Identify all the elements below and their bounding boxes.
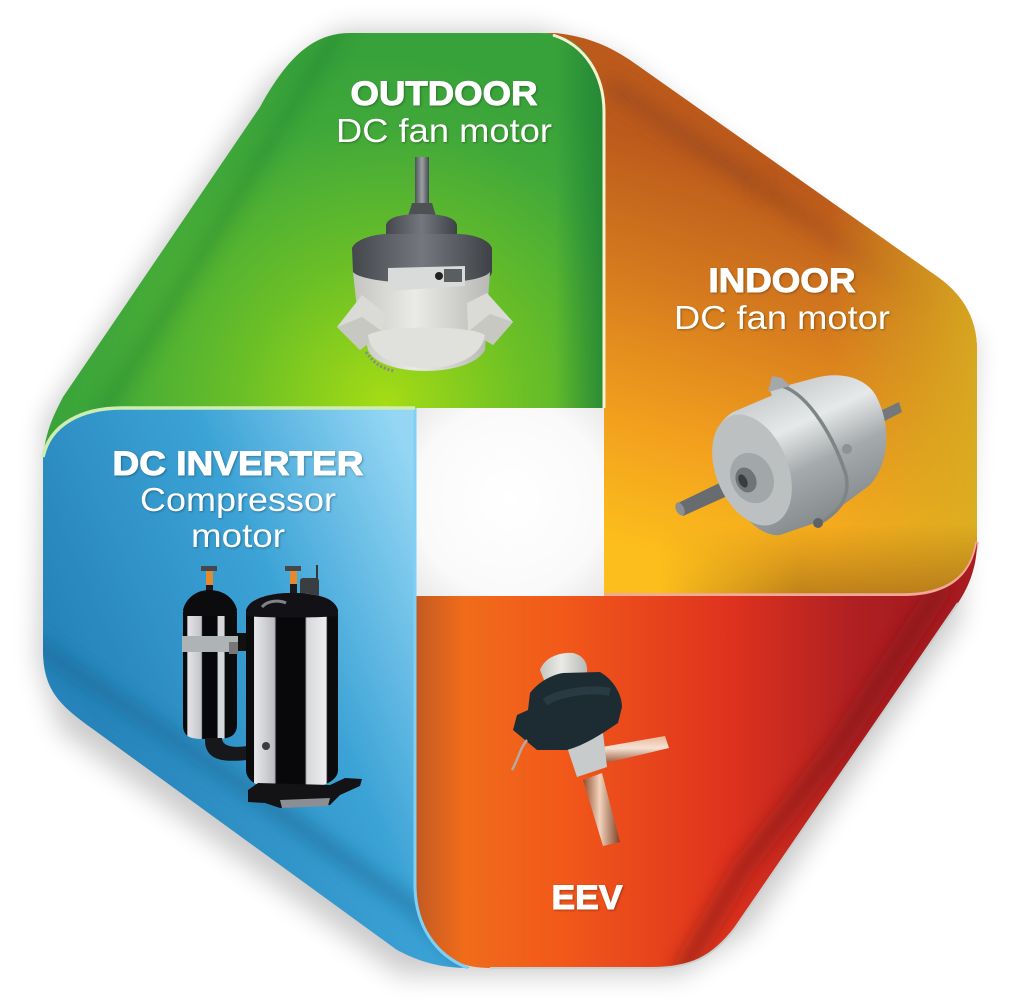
icon: compressor [182, 565, 362, 808]
panel: indoor orange [540, 33, 977, 596]
panel: center [410, 404, 608, 600]
subheading: outdoor: DC fan motor [336, 112, 552, 149]
panel: outdoor green [43, 20, 605, 457]
icon: outdoor fan motor [337, 157, 513, 371]
heading: indoor: INDOOR [708, 262, 856, 300]
panel: compressor blue [30, 408, 480, 975]
subheading: compressor: Compressor [140, 481, 336, 518]
icon: EEV valve [512, 653, 669, 846]
heading: EEV: EEV [552, 879, 623, 917]
heading: DC inverter: DC INVERTER [112, 445, 364, 483]
panel: EEV red [415, 542, 977, 975]
subheading: motor: motor [191, 517, 285, 554]
subheading: indoor: DC fan motor [674, 299, 890, 336]
heading: outdoor: OUTDOOR [350, 75, 538, 113]
icon: indoor fan motor [673, 375, 902, 537]
